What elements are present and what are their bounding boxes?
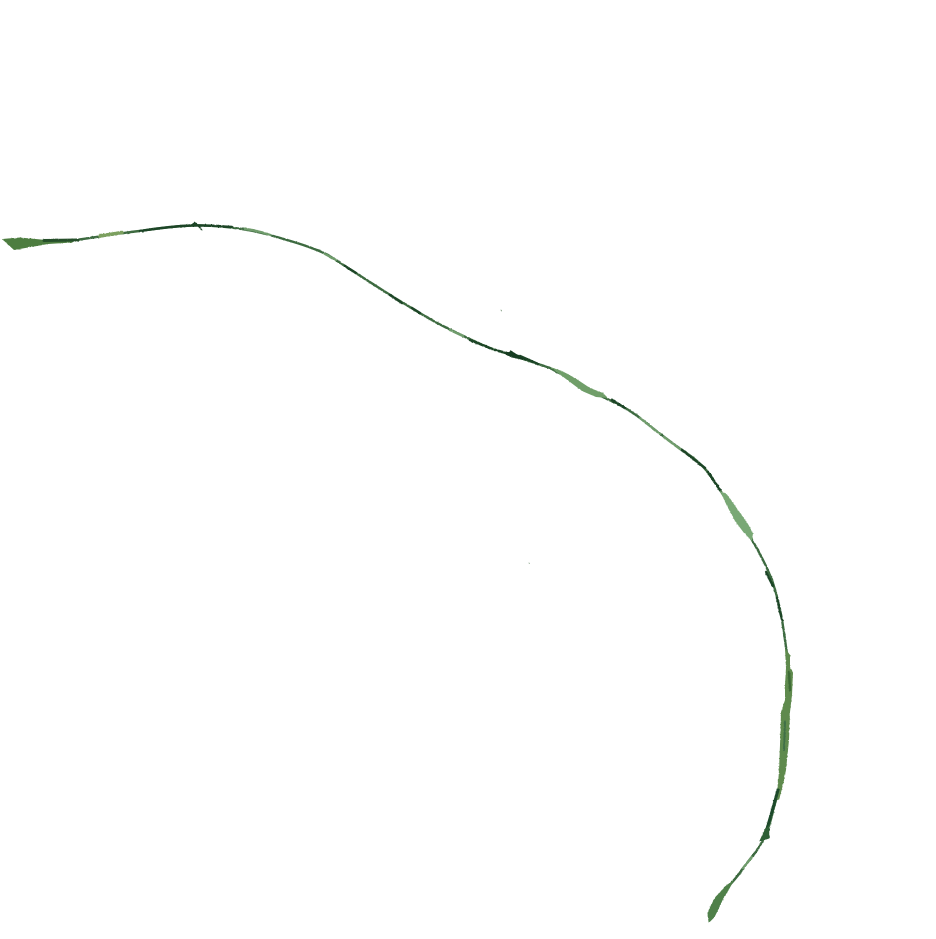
light stem accents [245,229,752,868]
main stem [60,225,790,893]
stray specks [501,310,530,564]
vine stem and leaves [2,222,793,922]
dark knot [191,222,202,230]
pale leaf segment 2 [720,491,753,541]
left leaf tip [2,238,78,250]
small stem node [760,826,769,841]
right lower thick olive leaf [775,648,793,800]
knot on stem [505,351,526,360]
pale leaf segment 1 [550,367,608,398]
dark lower stem band [766,790,778,832]
bottom leaf tip [708,881,733,922]
dark stem accents [140,225,782,620]
